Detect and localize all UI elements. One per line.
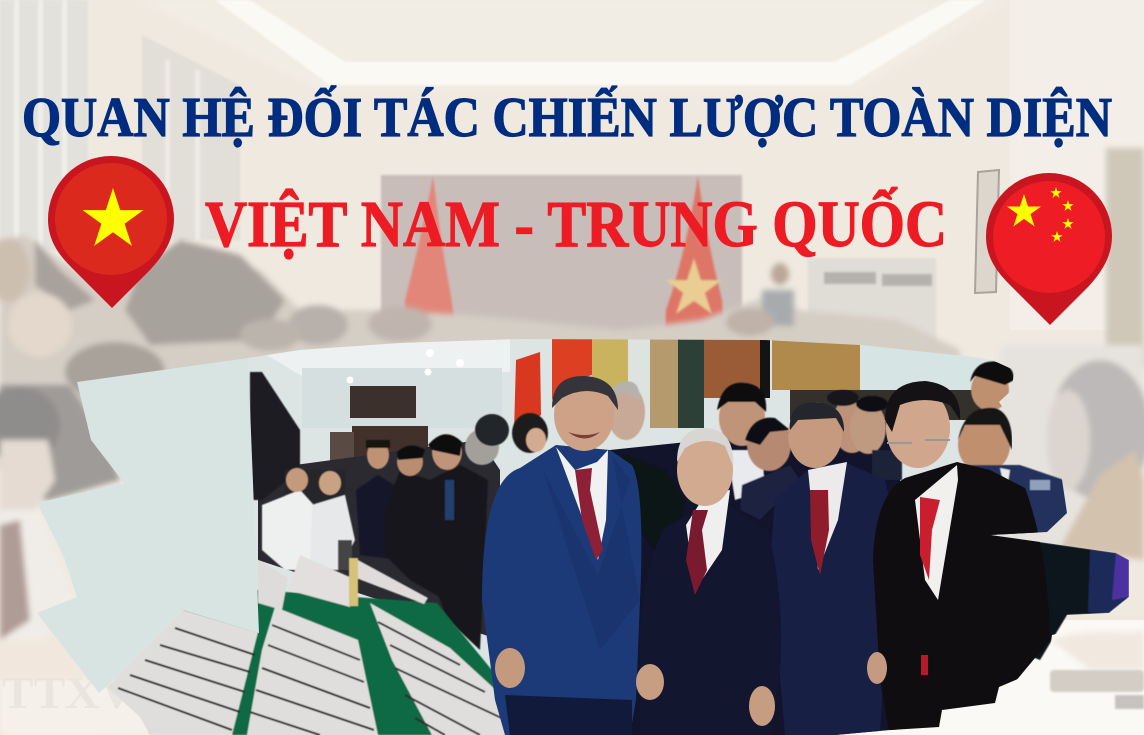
title: line 2: VIỆT NAM - TRUNG QUỐC bbox=[205, 187, 947, 261]
Xi hand bbox=[495, 648, 525, 688]
right wall and picture bbox=[1010, 0, 1144, 330]
Trọng head bbox=[677, 434, 733, 506]
left curtains bbox=[0, 0, 240, 250]
Xi head bbox=[554, 391, 614, 451]
dark stage backdrop bbox=[381, 175, 742, 345]
watermark text: TTXV bbox=[2, 667, 134, 718]
man in navy suit on the right bbox=[770, 402, 892, 735]
front centre folders bbox=[247, 607, 378, 735]
Lưu hand bbox=[867, 652, 887, 684]
red flags bbox=[514, 352, 541, 432]
Trọng figure in dark suit bbox=[636, 428, 781, 735]
icon: China flag map pin bbox=[986, 173, 1112, 325]
Xi shirt and tie bbox=[556, 447, 608, 560]
faded woman at right bbox=[1000, 345, 1144, 560]
document table bbox=[108, 556, 500, 735]
faded China flag bbox=[405, 176, 458, 345]
faded crowd and press group bbox=[0, 235, 960, 470]
main photo: delegation viewing the documents bbox=[107, 335, 1129, 735]
back row delegates bbox=[605, 361, 1129, 660]
press crowd bbox=[250, 372, 355, 570]
icon: Vietnam flag map pin bbox=[48, 156, 174, 308]
ceiling of hall bbox=[267, 339, 510, 376]
men in dark suits behind table bbox=[356, 413, 548, 650]
faded woman at left bbox=[0, 385, 120, 735]
bright ceiling edge bbox=[215, 0, 985, 85]
Xi figure in navy suit bbox=[482, 376, 641, 735]
faded bottom left watermark area bbox=[0, 680, 160, 735]
Trọng hands bbox=[636, 664, 664, 700]
dark crowd backfill behind the front row bbox=[258, 440, 500, 640]
front right folders bbox=[369, 602, 505, 735]
dark backfill behind main figures bbox=[610, 420, 900, 735]
back folders bbox=[258, 560, 288, 610]
pale blue-green cut-out panel bbox=[37, 358, 259, 693]
faded glass cabinet bbox=[808, 258, 936, 348]
Lưu head bbox=[886, 400, 950, 468]
faded Vietnam flag bbox=[665, 176, 725, 345]
dark window and door bbox=[350, 386, 416, 418]
faded table at bottom right bbox=[830, 620, 1144, 735]
recessed ceiling with lights bbox=[302, 349, 502, 384]
front left folders bbox=[107, 610, 258, 735]
ceiling bbox=[140, 0, 1010, 90]
Lưu figure in black suit bbox=[867, 381, 1050, 735]
hall backdrop bbox=[248, 339, 1000, 668]
wood panels and marble bbox=[592, 338, 628, 388]
